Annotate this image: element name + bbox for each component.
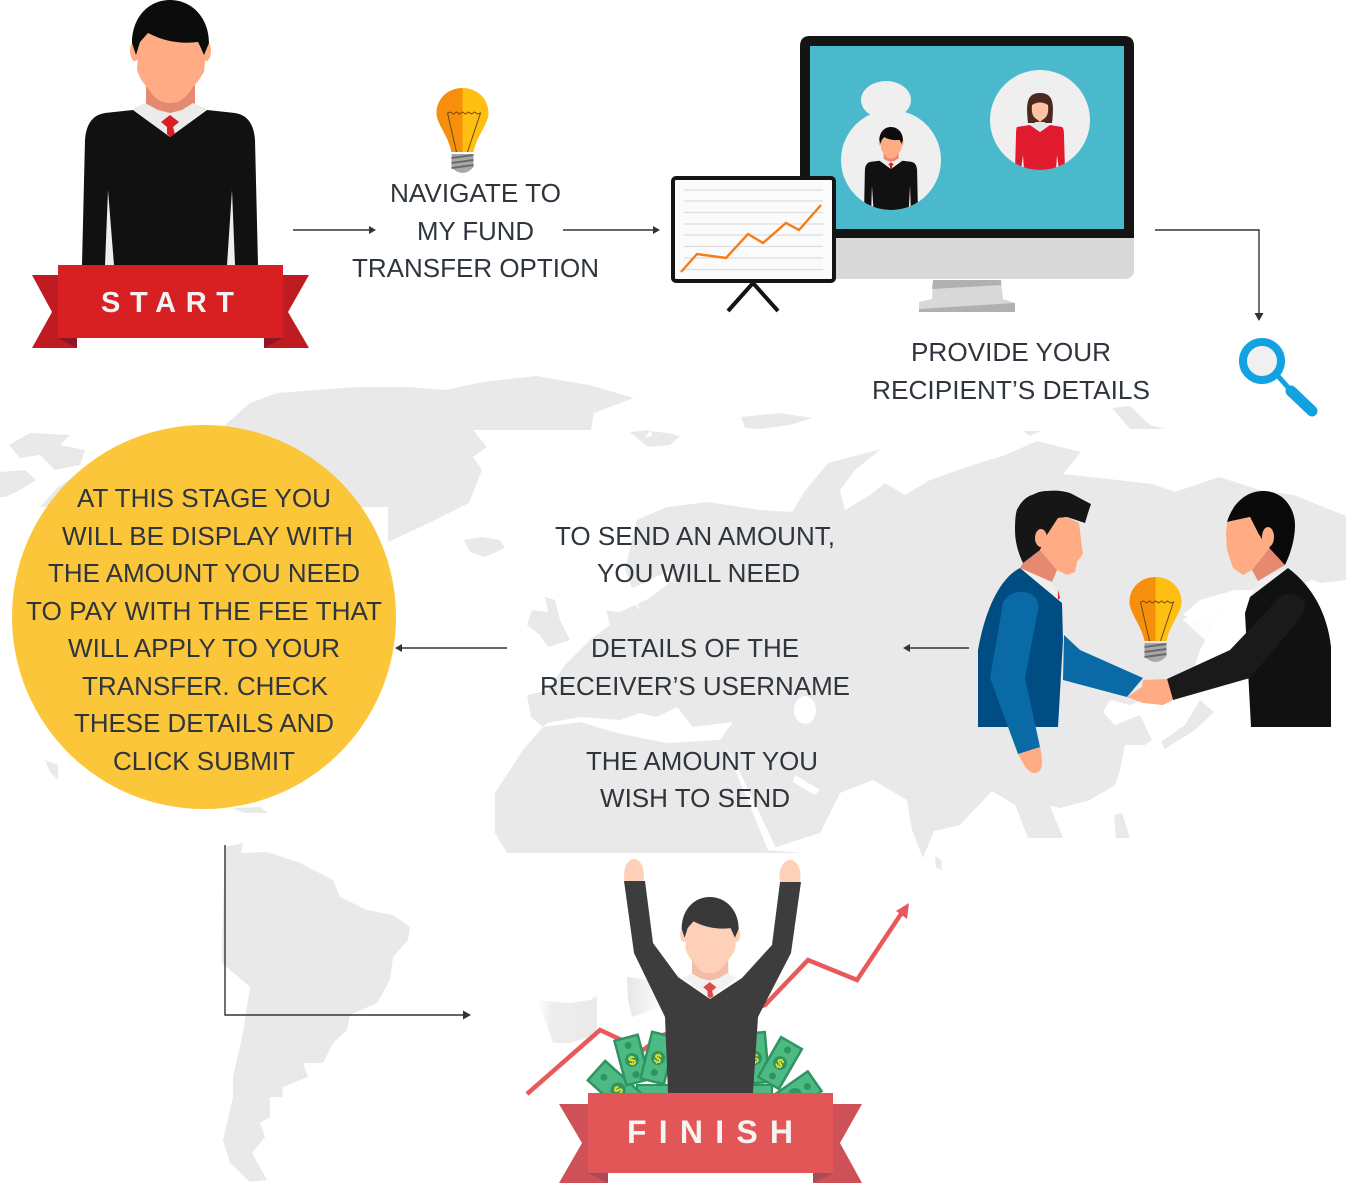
arrow: details to circle — [395, 644, 507, 652]
map: Iceland — [464, 537, 505, 557]
bill: $ — [627, 1052, 638, 1069]
text: provide details: PROVIDE YOUR — [911, 337, 1111, 367]
left businessman — [978, 491, 1143, 773]
text: navigate: MY FUND — [417, 216, 534, 246]
text: amount details: TO SEND AN AMOUNT, — [555, 521, 835, 551]
red trend arrow — [527, 903, 909, 1094]
flat bills — [637, 1085, 772, 1096]
map: Greenland and North America — [40, 376, 634, 542]
icon: light bulb top — [436, 88, 488, 173]
avatar: woman — [990, 70, 1090, 170]
callout text: WILL APPLY TO YOUR — [68, 633, 340, 663]
bill — [768, 1071, 822, 1119]
text: navigate: TRANSFER OPTION — [352, 253, 599, 283]
map: faded patches behind finish figure — [537, 977, 665, 1043]
icon: magnifier — [1243, 342, 1312, 411]
map: Eurasia and Africa — [495, 441, 1346, 858]
finish figure — [624, 859, 801, 1093]
map: seas — [543, 570, 1250, 850]
arrow: screen to magnifier — [1155, 230, 1264, 321]
text: amount details: YOU WILL NEED — [597, 558, 800, 588]
presentation board chart — [673, 178, 834, 311]
world map background — [0, 376, 1346, 1182]
text: navigate — [352, 178, 599, 283]
text: amount details: WISH TO SEND — [600, 783, 790, 813]
start banner — [32, 265, 309, 348]
banner label: finish: FINISH — [627, 1114, 793, 1150]
callout text: THESE DETAILS AND — [74, 708, 334, 738]
callout text: TO PAY WITH THE FEE THAT — [26, 596, 382, 626]
text: amount details: RECEIVER’S USERNAME — [540, 671, 850, 701]
avatar: man — [841, 81, 941, 214]
arrow: start to navigate — [293, 226, 376, 234]
arrow: navigate to screen — [563, 226, 660, 234]
bill: $ — [751, 1051, 760, 1066]
map: Arctic islands — [0, 406, 1165, 813]
map: South America — [222, 843, 410, 1182]
text: provide details — [872, 337, 1150, 405]
bill — [641, 1032, 675, 1084]
start figure — [82, 0, 258, 265]
text: amount details: THE AMOUNT YOU — [586, 746, 818, 776]
callout text: WILL BE DISPLAY WITH — [62, 521, 353, 551]
callout text — [26, 483, 382, 776]
money pile — [588, 1032, 822, 1119]
monitor — [800, 36, 1134, 312]
map: Japan — [1161, 700, 1214, 749]
arrow: circle to finish — [225, 845, 471, 1020]
map: British Isles — [527, 597, 570, 647]
bill — [758, 1037, 802, 1089]
map: Sri Lanka and islands — [935, 813, 1130, 870]
right businessman — [1167, 491, 1331, 727]
bill — [614, 1035, 650, 1085]
bill: $ — [773, 1055, 787, 1072]
handshake illustration — [978, 491, 1331, 773]
text: navigate: NAVIGATE TO — [390, 178, 561, 208]
bill: $ — [653, 1050, 664, 1067]
finish banner — [559, 1093, 862, 1183]
banner label: start: START — [101, 287, 234, 319]
arrow: handshake to details — [903, 644, 969, 652]
callout text: TRANSFER. CHECK — [82, 671, 329, 701]
icon: light bulb middle — [1130, 577, 1182, 662]
bill: $ — [610, 1082, 627, 1098]
clasped hands — [1127, 679, 1173, 705]
callout text: THE AMOUNT YOU NEED — [48, 558, 360, 588]
callout text: CLICK SUBMIT — [113, 746, 295, 776]
text: amount details — [540, 521, 850, 813]
text: provide details: RECIPIENT’S DETAILS — [872, 375, 1150, 405]
bill — [588, 1061, 648, 1119]
bill — [741, 1032, 769, 1084]
callout text: AT THIS STAGE YOU — [77, 483, 331, 513]
text: amount details: DETAILS OF THE — [591, 633, 799, 663]
circle callout: review and submit — [12, 425, 396, 809]
